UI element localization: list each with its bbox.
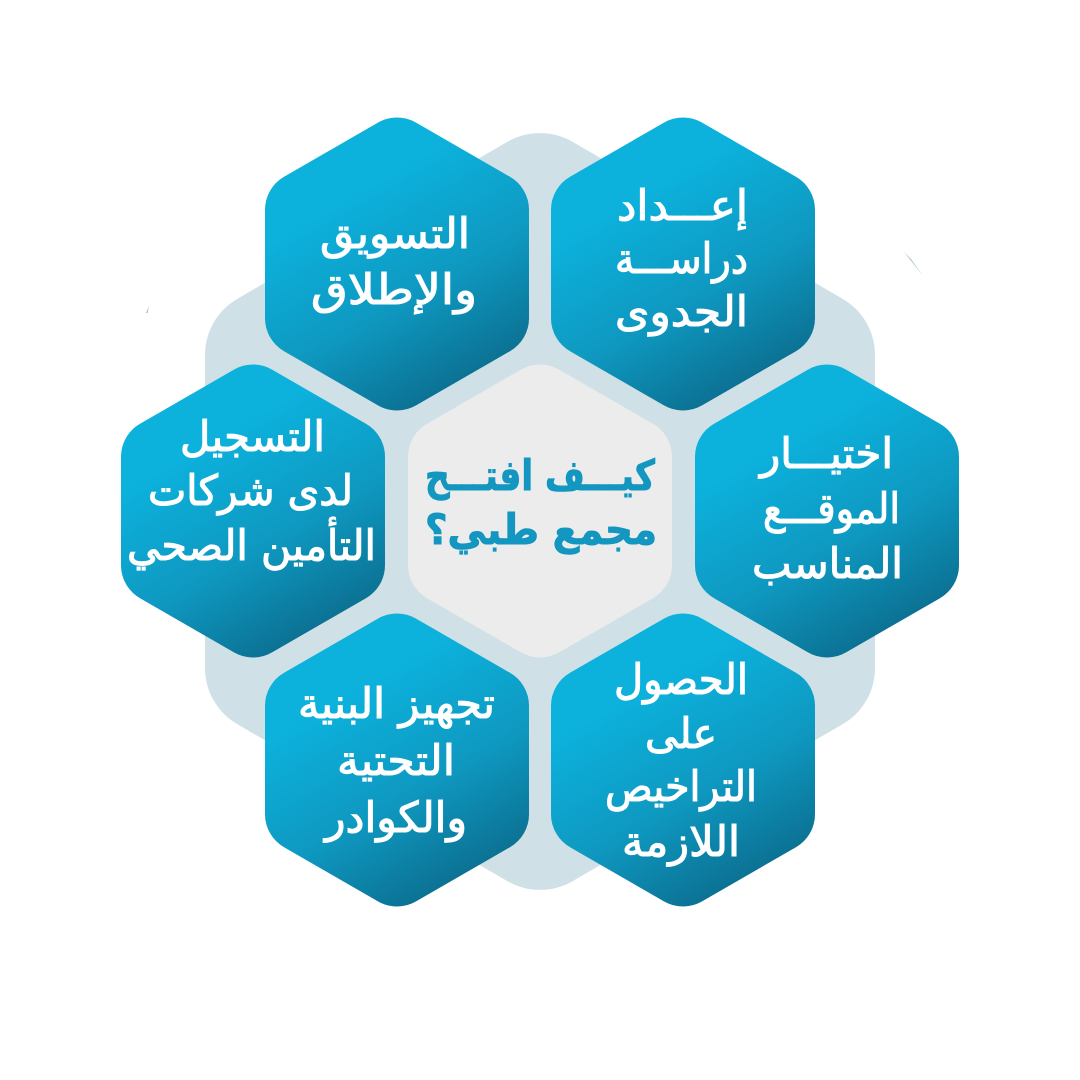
hexagon: insurance registration: التسجيل — [180, 412, 325, 461]
centre hexagon: title — [408, 364, 672, 658]
hexagon: marketing and launch — [265, 117, 529, 411]
hexagon: site selection: الموقـــع — [763, 484, 900, 534]
hexagon: insurance registration: التأمين الصحي — [127, 516, 376, 571]
hexagon: infrastructure and staff — [265, 613, 529, 907]
hexagon: licences: على — [645, 709, 717, 758]
hexagon: infrastructure and staff: التحتية — [337, 736, 455, 785]
centre hexagon: title: مجمع طبي؟ — [425, 505, 657, 555]
hexagon: insurance registration: لدى شركات — [148, 466, 353, 515]
decorative sliver right — [904, 252, 923, 276]
hexagon: licences: اللازمة — [622, 817, 740, 866]
hexagon: feasibility study — [551, 117, 815, 411]
hexagon: marketing and launch: التسويق — [320, 209, 470, 258]
hexagon: licences — [551, 613, 815, 907]
hexagon: marketing and launch: والإطلاق — [311, 265, 477, 314]
hexagon: infrastructure and staff: تجهيز البنية — [298, 679, 495, 729]
background large hexagon — [205, 133, 875, 890]
decorative sliver left — [146, 306, 149, 313]
hexagon: feasibility study: إعـــداد — [617, 181, 748, 231]
hexagon: licences: التراخيص — [605, 762, 757, 811]
hexagon: feasibility study: دراســـة — [615, 234, 748, 283]
hexagon: infrastructure and staff: والكوادر — [323, 793, 467, 842]
hexagon: licences: الحصول — [614, 655, 748, 704]
hexagon: insurance registration — [121, 364, 385, 658]
hexagon: site selection: اختيـــار — [758, 429, 893, 478]
hexagon: site selection — [695, 364, 959, 658]
hexagon: site selection: المناسب — [752, 539, 903, 588]
hexagon: feasibility study: الجدوى — [615, 287, 748, 336]
centre hexagon: title: كيـــف افتـــح — [425, 451, 655, 501]
